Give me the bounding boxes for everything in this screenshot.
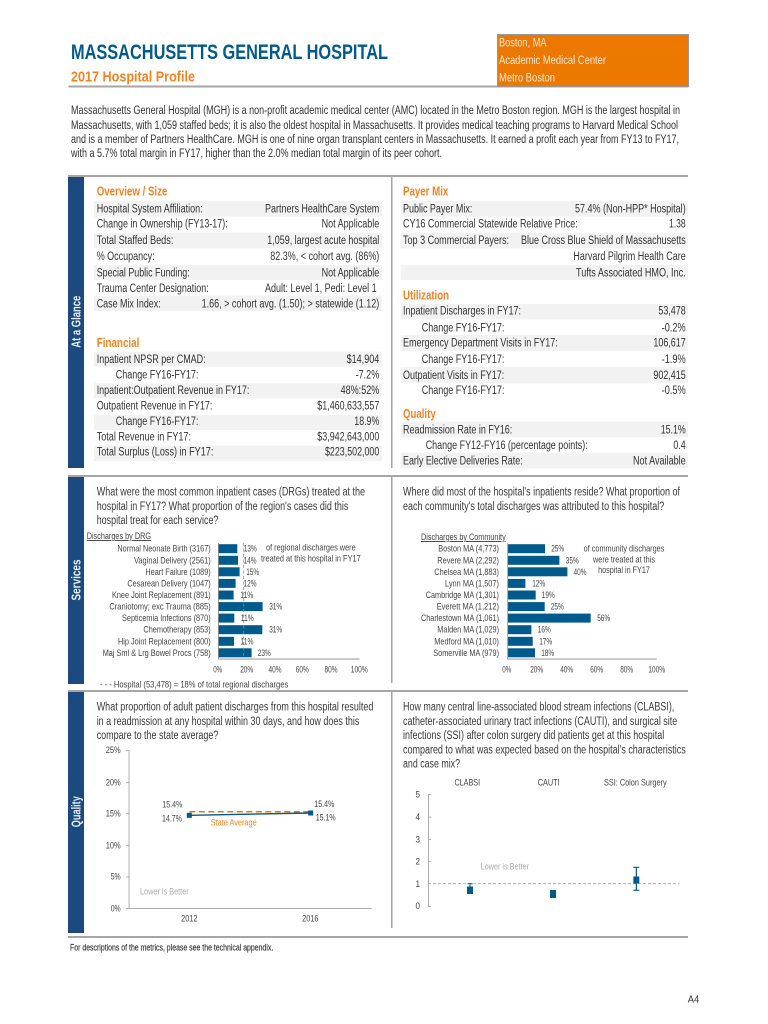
x axis labels: 100% — [648, 664, 666, 675]
category labels: Maj Sml & Lrg Bowel Procs (758) — [103, 648, 211, 659]
CAUTI marker — [550, 890, 556, 898]
table: utilization: 53,478 — [658, 306, 686, 318]
question: communities: each community's total discharges was attributed to this hospital? — [403, 501, 664, 513]
hospital line — [187, 810, 313, 818]
category labels: Normal Neonate Birth (3167) — [117, 544, 211, 555]
table: financial: $223,502,000 — [325, 447, 379, 459]
location box: Academic Medical Center — [499, 55, 606, 67]
table: financial: 18.9% — [354, 416, 379, 428]
table: quality — [401, 422, 688, 468]
value labels: 12% — [532, 578, 546, 589]
y axis labels: 0 — [415, 901, 420, 912]
y axis labels: 1 — [415, 879, 420, 890]
value labels — [240, 544, 283, 659]
intro paragraph — [70, 105, 680, 160]
annotation: hospital in FY17 — [598, 565, 650, 576]
annotation: of community discharges — [584, 543, 665, 554]
question: readmission: in a readmission at any hospital within 30 days, and how does this — [97, 716, 360, 728]
data labels — [162, 799, 336, 825]
category labels: Cesarean Delivery (1047) — [127, 578, 211, 589]
category labels: Chemotherapy (853) — [143, 625, 211, 636]
subtitle: 2017 Hospital Profile — [71, 68, 195, 86]
bars — [218, 544, 263, 657]
table: utilization: Change FY16-FY17: — [422, 322, 504, 334]
header — [68, 34, 688, 88]
annotation: of regional discharges were — [266, 543, 356, 554]
table: quality: Readmission Rate in FY16: — [403, 424, 512, 436]
category labels — [421, 544, 499, 659]
bars — [508, 544, 591, 657]
question: communities — [403, 487, 681, 513]
table: utilization: Change FY16-FY17: — [422, 385, 504, 397]
y axis labels — [106, 745, 121, 914]
table: payer mix: Tufts Associated HMO, Inc. — [576, 267, 686, 279]
x axis labels: 0% — [502, 664, 512, 675]
heading: payer mix: Payer Mix — [403, 184, 449, 198]
table: overview / size: Total Staffed Beds: — [97, 235, 173, 247]
y axis labels: 3 — [415, 834, 420, 845]
category labels: Knee Joint Replacement (891) — [112, 590, 211, 601]
table: payer mix: Top 3 Commercial Payers: — [403, 235, 509, 247]
category labels: Charlestown MA (1,061) — [421, 613, 499, 624]
category labels: Septicemia Infections (870) — [122, 613, 211, 624]
question: infections: infections (SSI) after colon surgery did patients get at this hospital — [403, 730, 664, 742]
data labels: 14.7% — [162, 814, 182, 825]
category labels: Boston MA (4,773) — [438, 544, 499, 555]
line chart: readmission rate — [106, 745, 372, 925]
x axis labels: 2016 — [302, 914, 318, 925]
header rule — [68, 86, 688, 88]
question: infections — [403, 702, 686, 771]
CLABSI marker — [467, 884, 473, 894]
table: utilization: Emergency Department Visits in FY17: — [403, 338, 558, 350]
category labels: Malden MA (1,029) — [437, 625, 499, 636]
reference line legend: - - - Hospital (53,478) = 18% of total regional discharges — [100, 680, 288, 691]
chart: infection ratios — [415, 777, 679, 912]
data labels: 15.4% — [314, 799, 335, 810]
state average line — [189, 811, 311, 813]
table: quality: Not Available — [633, 456, 686, 468]
value labels: 11% — [240, 636, 254, 647]
y axis labels: 5 — [415, 789, 420, 800]
value labels: 15% — [246, 567, 260, 578]
x axis labels: 20% — [240, 664, 254, 675]
axes — [126, 750, 372, 909]
panel: quality — [68, 692, 686, 933]
category labels — [103, 544, 211, 659]
heading: overview / size: Overview / Size — [97, 184, 167, 198]
y axis labels: 20% — [106, 777, 121, 788]
heading: financial: Financial — [97, 335, 139, 350]
category labels: Revere MA (2,292) — [437, 555, 499, 566]
table: financial: Inpatient:Outpatient Revenue in FY17: — [97, 385, 249, 397]
table: overview / size: Not Applicable — [322, 267, 379, 279]
y axis labels: 10% — [106, 840, 121, 851]
data labels: 15.4% — [162, 800, 183, 811]
table: utilization: 902,415 — [653, 370, 686, 382]
column headings: SSI: Colon Surgery — [604, 777, 667, 788]
value labels: 31% — [269, 625, 283, 636]
table: overview / size: 1,059, largest acute hospital — [267, 235, 379, 247]
category labels: Medford MA (1,010) — [434, 636, 499, 647]
table: overview / size: Not Applicable — [322, 219, 379, 231]
table: utilization: Outpatient Visits in FY17: — [403, 370, 504, 382]
panel: at a glance — [68, 177, 688, 468]
table: payer mix — [401, 201, 688, 280]
table: quality: Change FY12-FY16 (percentage points): — [426, 440, 588, 452]
table: financial: $1,460,633,557 — [317, 401, 379, 413]
panel: services — [68, 477, 681, 691]
location box: Boston, MA — [499, 38, 547, 50]
table: payer mix: Harvard Pilgrim Health Care — [573, 251, 686, 263]
table: overview / size: Change in Ownership (FY13-17): — [97, 219, 228, 231]
bar chart: discharges by DRG — [87, 531, 368, 691]
x axis labels — [502, 664, 666, 675]
value labels: 23% — [258, 648, 271, 659]
table: financial: Total Revenue in FY17: — [97, 432, 191, 444]
axes — [507, 543, 657, 660]
intro paragraph: with a 5.7% total margin in FY17, higher than the 2.0% median total margin of its peer cohort. — [70, 148, 442, 160]
x axis labels — [213, 664, 368, 675]
table: payer mix: Public Payer Mix: — [403, 203, 472, 215]
table: overview / size: Partners HealthCare System — [265, 203, 379, 215]
section rules and dividers — [68, 175, 688, 938]
column headings: CLABSI — [454, 777, 480, 788]
category labels: Lynn MA (1,507) — [445, 578, 499, 589]
table: financial: 48%:52% — [341, 385, 379, 397]
x axis labels: 60% — [590, 664, 604, 675]
bar chart: discharges by community — [421, 532, 666, 675]
category labels: Somerville MA (979) — [433, 648, 499, 659]
table: utilization — [401, 304, 688, 397]
y axis — [428, 794, 431, 907]
table: overview / size: Special Public Funding: — [97, 267, 190, 279]
chart title: Discharges by Community — [421, 532, 506, 543]
page number: A4 — [688, 994, 700, 1006]
y axis labels: 4 — [415, 812, 420, 823]
x axis labels: 80% — [324, 664, 338, 675]
value labels: 18% — [541, 648, 555, 659]
table: financial — [94, 352, 382, 461]
heading: utilization: Utilization — [403, 288, 449, 302]
x axis labels: 60% — [296, 664, 309, 675]
x axis labels: 40% — [268, 664, 282, 675]
expected ratio line — [428, 883, 679, 885]
x axis labels: 0% — [213, 664, 223, 675]
question: DRGs: hospital in FY17? What proportion of the region's cases did this — [97, 501, 349, 513]
x axis labels: 100% — [351, 664, 368, 675]
table: overview / size: 1.66, > cohort avg. (1.50); > statewide (1.12) — [202, 298, 379, 310]
table: financial: $14,904 — [347, 354, 380, 366]
category labels: Heart Failure (1089) — [145, 567, 211, 578]
state average label: State Average — [211, 817, 257, 828]
question: DRGs: What were the most common inpatient cases (DRGs) treated at the — [97, 487, 365, 499]
data labels: 15.1% — [316, 812, 336, 823]
x axis labels: 20% — [530, 664, 544, 675]
value labels: 16% — [538, 625, 551, 636]
y axis labels — [415, 789, 420, 912]
x axis labels — [181, 914, 318, 925]
question: DRGs: hospital treat for each service? — [97, 515, 218, 527]
side tab: quality — [68, 692, 84, 933]
value labels: 40% — [574, 567, 587, 578]
annotation: were treated at this — [592, 555, 655, 566]
hospital share reference line — [243, 543, 245, 659]
table: utilization: Change FY16-FY17: — [422, 354, 504, 366]
title: MASSACHUSETTS GENERAL HOSPITAL — [71, 41, 388, 64]
category labels: Craniotomy; exc Trauma (885) — [109, 602, 211, 613]
footnote: For descriptions of the metrics, please see the technical appendix. — [70, 942, 273, 952]
side tab: at a glance: At a Glance — [68, 296, 84, 348]
table: overview / size: 82.3%, < cohort avg. (86%) — [270, 251, 379, 263]
x axis labels: 40% — [560, 664, 574, 675]
SSI colon surgery marker — [633, 867, 639, 890]
table: financial: Change FY16-FY17: — [116, 369, 198, 381]
value labels: 25% — [551, 544, 565, 555]
table: utilization: -0.5% — [662, 385, 686, 397]
value labels — [532, 544, 611, 659]
question: infections: compared to what was expected based on the hospital's characteristics — [403, 744, 686, 756]
chart title: Discharges by DRG — [87, 531, 151, 542]
table: overview / size — [94, 201, 382, 311]
table: financial: -7.2% — [356, 369, 379, 381]
y axis labels: 0% — [111, 903, 121, 914]
x axis labels: 2012 — [181, 914, 197, 925]
table: financial: Change FY16-FY17: — [116, 416, 198, 428]
annotation: treated at this hospital in FY17 — [261, 554, 361, 565]
y axis labels: 15% — [106, 808, 121, 819]
table: utilization: -1.9% — [662, 354, 686, 366]
table: utilization: Inpatient Discharges in FY17: — [403, 306, 521, 318]
table: utilization: -0.2% — [662, 322, 686, 334]
table: utilization: 106,617 — [653, 338, 686, 350]
table: payer mix: CY16 Commercial Statewide Relative Price: — [403, 219, 578, 231]
category labels: Hip Joint Replacement (800) — [118, 636, 211, 647]
table: financial: Outpatient Revenue in FY17: — [97, 401, 212, 413]
lower is better note: Lower is Better — [481, 862, 529, 873]
value labels: 14% — [244, 555, 257, 566]
value labels: 17% — [539, 636, 553, 647]
side tab: services — [68, 477, 84, 684]
value labels: 11% — [240, 590, 254, 601]
category labels: Everett MA (1,212) — [437, 602, 499, 613]
table: payer mix: 57.4% (Non-HPP* Hospital) — [575, 203, 686, 215]
value labels: 31% — [269, 602, 283, 613]
table: overview / size: Hospital System Affiliation: — [97, 203, 203, 215]
side tab: quality: Quality — [68, 796, 84, 827]
table: quality: 15.1% — [661, 424, 686, 436]
annotation — [584, 543, 665, 576]
y axis labels: 5% — [111, 872, 121, 883]
question: DRGs — [97, 487, 365, 527]
table: overview / size: % Occupancy: — [97, 251, 155, 263]
table: financial: Total Surplus (Loss) in FY17: — [97, 447, 213, 459]
category labels: Cambridge MA (1,301) — [426, 590, 499, 601]
table: quality: Early Elective Deliveries Rate: — [403, 456, 523, 468]
location box: Metro Boston — [499, 72, 555, 84]
value labels: 13% — [244, 544, 257, 555]
location box — [498, 34, 688, 86]
table: payer mix: 1.38 — [669, 219, 686, 231]
y axis labels: 2 — [415, 857, 420, 868]
table: overview / size: Case Mix Index: — [97, 298, 161, 310]
y axis labels: 25% — [106, 745, 121, 756]
value labels: 12% — [244, 578, 257, 589]
question: infections: catheter-associated urinary tract infections (CAUTI), and surgical site — [403, 716, 677, 728]
table: overview / size: Trauma Center Designation: — [97, 283, 209, 295]
table: payer mix: Blue Cross Blue Shield of Massachusetts — [521, 235, 686, 247]
heading: quality: Quality — [403, 406, 436, 421]
value labels: 35% — [566, 555, 579, 566]
question: communities: Where did most of the hospital's inpatients reside? What proportion of — [403, 487, 681, 499]
table: financial: $3,942,643,000 — [317, 432, 379, 444]
value labels: 11% — [241, 613, 254, 624]
table: overview / size: Adult: Level 1, Pedi: Level 1 — [265, 283, 377, 295]
x axis labels: 80% — [620, 664, 634, 675]
value labels: 19% — [542, 590, 555, 601]
category labels: Vaginal Delivery (2561) — [134, 555, 211, 566]
question: readmission: compare to the state average? — [97, 730, 218, 742]
column headings — [454, 777, 667, 788]
axes — [218, 543, 360, 660]
question: readmission: What proportion of adult patient discharges from this hospital resulted — [97, 702, 373, 714]
table: quality: 0.4 — [673, 440, 686, 452]
question: readmission — [97, 702, 373, 742]
question: infections: How many central line-associated blood stream infections (CLABSI), — [403, 702, 674, 714]
side tab: at a glance — [68, 177, 84, 468]
category labels: Chelsea MA (1,883) — [434, 567, 499, 578]
annotation — [261, 543, 361, 565]
lower is better note: Lower is Better — [140, 887, 189, 898]
question: infections: and case mix? — [403, 759, 460, 771]
table: financial: Inpatient NPSR per CMAD: — [97, 354, 206, 366]
column headings: CAUTI — [538, 777, 560, 788]
side tab: services: Services — [68, 560, 84, 600]
value labels: 25% — [551, 602, 564, 613]
value labels: 56% — [597, 613, 611, 624]
